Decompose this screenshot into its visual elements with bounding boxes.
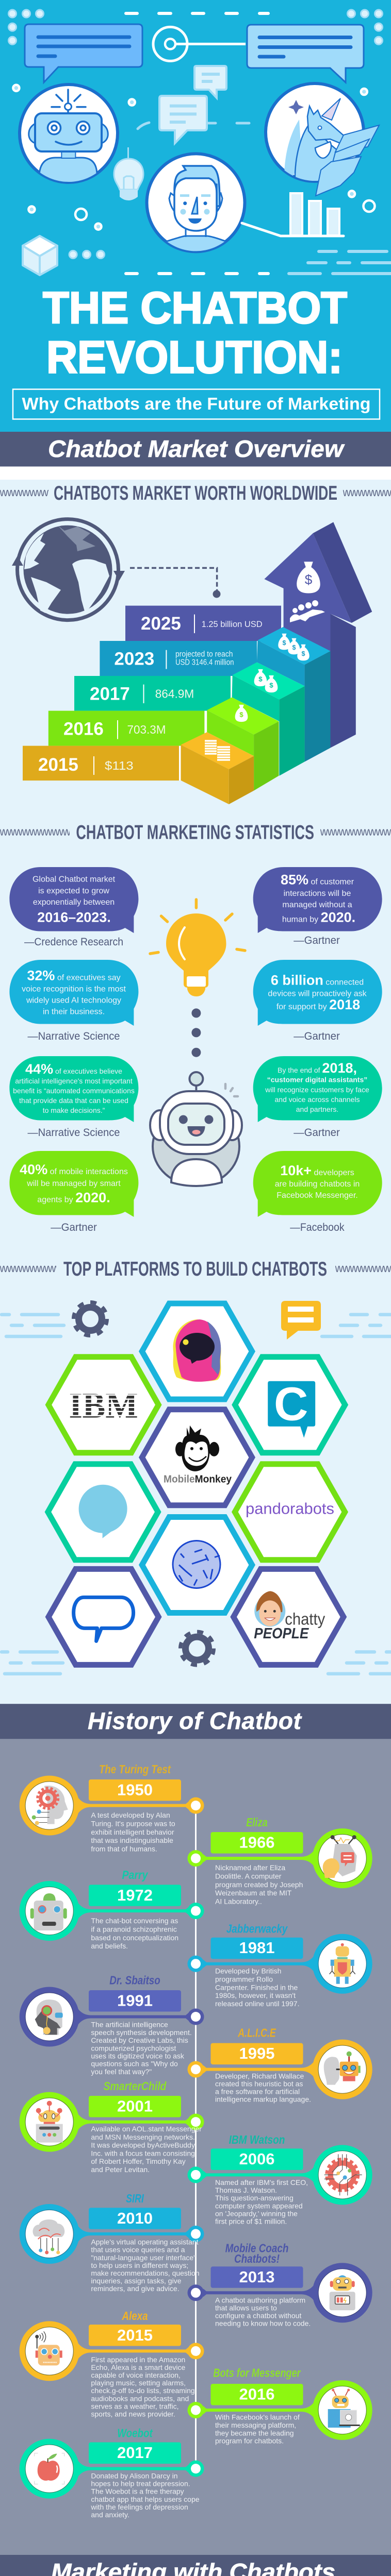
hexagon: chatty people: PEOPLE <box>254 1625 309 1642</box>
timeline 1991: uses its digitized voice to ask <box>91 2052 185 2060</box>
timeline 2013: configure a chatbot without <box>215 2311 301 2319</box>
timeline 2001: SmarterChild <box>104 2079 167 2093</box>
ring dots <box>13 85 374 230</box>
timeline 1966 <box>188 1816 372 1906</box>
hexagon: chatty people: chatty <box>285 1609 325 1628</box>
stat: end of 2018: By the end of 2018, <box>278 1060 357 1076</box>
icon: robot battery <box>330 2275 355 2310</box>
stat: 40 percent: —Gartner <box>51 1222 97 1233</box>
timeline 2001: Inc. with a focus team consisting <box>91 2149 195 2157</box>
subtitle box: Why Chatbots are the Future of Marketing <box>22 394 371 413</box>
timeline 2010: that uses voice queries and a <box>91 2246 185 2254</box>
stat: 44 percent: artificial intelligence's most important <box>15 1077 133 1085</box>
timeline 1991: you feel that way?" <box>91 2067 152 2076</box>
timeline 1972: The chat-bot conversing as <box>91 1917 178 1925</box>
stat: end of 2018: will recognize customers by face <box>265 1086 369 1094</box>
stat: 85 percent: human by 2020. <box>282 910 355 925</box>
timeline 1966: Eliza <box>246 1816 268 1829</box>
stat: end of 2018: and voice across channels <box>274 1095 360 1104</box>
icon: robot with laptop <box>328 2388 360 2428</box>
icon: robot with control box <box>36 2101 63 2143</box>
icon: money bags: $ <box>269 682 273 689</box>
stat: 32 percent: in their business. <box>43 1008 105 1016</box>
step: yellow <box>181 732 254 804</box>
timeline 2010: SIRI <box>126 2192 144 2205</box>
icon: robot conversation <box>323 1835 357 1878</box>
target connector <box>153 27 246 61</box>
timeline 1995: created this heuristic bot as <box>215 2080 303 2088</box>
hexagon: chatty people <box>234 1569 344 1665</box>
timeline 1966: AI Laboratory.. <box>215 1897 262 1906</box>
timeline 1950: from that of humans. <box>91 1845 157 1853</box>
stat: 85 percent: —Gartner <box>294 935 340 946</box>
timeline 2017: and anxiety. <box>91 2511 129 2519</box>
title: REVOLUTION: <box>46 332 343 382</box>
hexagon: C logo <box>235 1357 345 1453</box>
icon: robot with hat <box>30 1893 67 1930</box>
timeline 2016 <box>188 2366 372 2445</box>
timeline 2015: Alexa <box>122 2309 148 2323</box>
section header: History of Chatbot: History of Chatbot <box>88 1707 302 1734</box>
bar 2025: 1.25 billion USD <box>202 619 263 629</box>
timeline 2001: and MSN Messenging networks. <box>91 2133 195 2141</box>
stat: Global Chatbot market: exponentially between <box>33 898 115 907</box>
icon: circuit gear <box>324 2154 362 2195</box>
timeline 1972: Parry <box>122 1868 149 1882</box>
stat: 10k developers: 10k+ developers <box>280 1163 354 1178</box>
timeline 2001: of Robert Hoffer, Timothy Kay <box>91 2157 186 2165</box>
icon: apple <box>35 2453 64 2484</box>
icon: money bags: $ <box>282 639 286 647</box>
stat: 44 percent: to make decisions.” <box>43 1106 105 1114</box>
stat: 6 billion: for support by 2018 <box>276 997 360 1012</box>
timeline 1991: questions such as "Why do <box>91 2060 178 2068</box>
timeline 2017: hopes to help treat depression. <box>91 2480 190 2488</box>
right speech bubble <box>247 25 364 82</box>
stat: 32 percent: voice recognition is the most <box>22 985 126 993</box>
bar 2023: 2023 <box>114 649 154 669</box>
bar 2016: 703.3M <box>127 723 166 736</box>
timeline 1991: Created by Creative Labs, this <box>91 2036 188 2044</box>
robot portrait <box>18 83 119 184</box>
stat: 6 billion: —Gartner <box>294 1030 340 1042</box>
timeline 2017 <box>20 2427 204 2519</box>
hexagon: blue globe <box>142 1517 252 1613</box>
timeline 1966: Weizenbaum at the MIT <box>215 1889 292 1897</box>
bar 2015: $113 <box>105 759 134 772</box>
timeline 1966: program created by Joseph <box>215 1880 303 1889</box>
bar chart icon <box>242 193 344 236</box>
timeline 2001: Available on AOL.stant Messenger <box>91 2125 202 2133</box>
timeline 1991: The artificial intelligence <box>91 2021 168 2029</box>
bar 2025 <box>125 606 281 641</box>
icon: money bags: $ <box>301 650 305 657</box>
timeline 1950 <box>20 1762 204 1853</box>
icon: yellow chat <box>281 1301 321 1340</box>
small chat bubbles <box>138 66 249 143</box>
hexagon: IBM <box>48 1357 158 1453</box>
timeline 2016: they became the leading <box>215 2429 294 2437</box>
hexagon: hooded logo <box>142 1303 252 1399</box>
timeline 1981: Developed by British <box>215 1967 281 1975</box>
stat: 40 percent: agents by 2020. <box>37 1190 110 1206</box>
hexagon: C logo: C <box>274 1378 308 1431</box>
big growth arrow <box>257 522 372 761</box>
timeline 1991 <box>20 1973 204 2076</box>
stat: end of 2018: —Gartner <box>294 1127 340 1139</box>
bar 2016 <box>48 711 204 746</box>
timeline 1966: Doolittle. A computer <box>215 1872 282 1880</box>
timeline 2017: chatbot app that helps users cope <box>91 2495 200 2503</box>
bar 2017: 2017 <box>90 684 130 704</box>
unicorn portrait <box>266 83 379 196</box>
timeline 2015: audiobooks and podcasts, and <box>91 2394 189 2402</box>
stat: 85 percent: managed without a <box>282 901 352 909</box>
timeline 2013: Chatbots! <box>234 2252 280 2265</box>
stat: Global Chatbot market <box>9 867 138 948</box>
section header: Chatbot Market Overview <box>0 432 391 467</box>
stat: 40 percent: 40% of mobile interactions <box>20 1162 128 1177</box>
timeline 2015: sports, and news provider. <box>91 2410 175 2418</box>
timeline 2013: Mobile Coach <box>225 2242 288 2255</box>
stat: 32 percent: 32% of executives say <box>27 968 121 984</box>
timeline 1981: programmer Rollo <box>215 1975 273 1983</box>
decorative dashes <box>2 1315 391 1674</box>
hexagon: blue bubble <box>48 1464 158 1560</box>
timeline 2017: with the feelings of depression <box>90 2503 188 2511</box>
chart: market worth isometric stairs <box>23 522 372 804</box>
icon: money bags <box>235 634 309 722</box>
stat: 32 percent <box>9 960 138 1042</box>
stat: Global Chatbot market: Global Chatbot market <box>32 875 116 884</box>
timeline 1995 <box>188 2026 372 2104</box>
timeline 2010: 2010 <box>117 2209 153 2227</box>
stat: 40 percent <box>9 1151 138 1233</box>
timeline 2010: "natural-language user interface" <box>91 2253 196 2262</box>
timeline 2001: and Peter Levitan. <box>91 2165 150 2174</box>
left speech bubble <box>25 24 142 82</box>
cube icon <box>23 236 57 275</box>
panel: hero background <box>0 0 391 432</box>
icon: money bags: $ <box>258 675 263 683</box>
timeline 2010: Apple's virtual operating assistant <box>91 2238 199 2246</box>
section header: Chatbot Market Overview: Chatbot Market Overview <box>48 435 345 462</box>
timeline 2006: Named after IBM's first CEO, <box>215 2178 308 2187</box>
stat: 32 percent: —Narrative Science <box>28 1030 120 1042</box>
icon: yellow lightbulb <box>150 900 245 996</box>
timeline 1966: 1966 <box>239 1833 274 1852</box>
stat: Global Chatbot market: is expected to grow <box>38 887 109 895</box>
bar 2025: 2025 <box>141 614 181 634</box>
stat: 6 billion: 6 billion connected <box>271 972 364 988</box>
timeline 1972: 1972 <box>117 1886 153 1904</box>
timeline 2015: Echo, Alexa is a smart device <box>91 2363 185 2371</box>
stat: end of 2018: “customer digital assistants” <box>267 1075 367 1083</box>
timeline 1950: 1950 <box>117 1781 153 1799</box>
hexagon: speech outline <box>48 1569 158 1665</box>
timeline 2013: A chatbot authoring platform <box>215 2296 305 2304</box>
timeline 2010 <box>20 2192 204 2293</box>
stat: end of 2018: and partners. <box>296 1105 338 1113</box>
timeline 1981 <box>188 1922 372 2008</box>
hexagon: IBM: IBM <box>69 1386 138 1426</box>
timeline 1981: 1980s, however, it wasn't <box>215 1991 296 1999</box>
icon: gear bottom <box>181 1632 214 1665</box>
decorative dots top <box>8 10 383 259</box>
bar 2023: USD 3146.4 million <box>175 658 234 667</box>
icon: gear top <box>73 1302 107 1335</box>
timeline 1991: speech synthesis development. <box>91 2028 192 2037</box>
timeline 2015: 2015 <box>117 2326 153 2344</box>
subtitle box <box>13 389 380 419</box>
icon: head and robot <box>324 2052 361 2085</box>
stat: 6 billion: devices will proactively ask <box>268 989 367 998</box>
timeline 2006: IBM Watson <box>229 2133 285 2146</box>
timeline 2015: playing music, setting alarms, <box>91 2379 186 2387</box>
stat: 44 percent: —Narrative Science <box>28 1127 120 1139</box>
timeline 2006: first price of $1 million. <box>215 2217 287 2225</box>
timeline 2010: to help users in different ways; <box>91 2261 188 2269</box>
robot face <box>179 1084 238 1137</box>
timeline 2017: Donated by Alison Darcy in <box>91 2472 177 2480</box>
timeline 2010: inqueries, assign tasks, give <box>91 2277 182 2285</box>
bar 2015: 2015 <box>38 755 78 775</box>
stat: 10k developers: Facebook Messenger. <box>276 1191 358 1200</box>
icon: gear head <box>32 1786 68 1825</box>
stat: 85 percent: 85% of customer <box>281 872 354 887</box>
stat: 44 percent: that provide data that can be used <box>19 1096 128 1105</box>
timeline spine <box>195 1813 197 2461</box>
timeline 2017: The Woebot is a free therapy <box>91 2487 184 2496</box>
timeline 2016: program for chatbots. <box>215 2437 284 2445</box>
bar 2016: 2016 <box>63 719 104 739</box>
timeline 2017: Woebot <box>117 2427 153 2440</box>
step: teal <box>232 663 305 776</box>
timeline 2010: make recommendations, question <box>91 2269 200 2277</box>
icon: AI head profile <box>35 1999 63 2035</box>
stat: 32 percent: widely used AI technology <box>26 996 121 1005</box>
stair edge line <box>180 626 283 781</box>
icon: arrow money bag and team <box>290 562 325 622</box>
stat: 85 percent: interactions will be <box>284 889 351 898</box>
timeline 2006: This question-answering <box>215 2194 294 2202</box>
pale dashes <box>289 251 391 274</box>
timeline 1950: exhibit intelligent behavior <box>91 1828 174 1836</box>
timeline 2001 <box>20 2079 204 2174</box>
stat: 40 percent: will be managed by smart <box>26 1179 121 1188</box>
timeline 1981: 1981 <box>239 1939 274 1957</box>
timeline 2015: serves as a weather, traffic, <box>91 2402 179 2410</box>
icon: shield robot <box>330 1943 355 1984</box>
panel: market overview background <box>0 480 391 1704</box>
timeline 1950: Turing. It's purpose was to <box>91 1819 175 1827</box>
bar 2023: projected to reach <box>175 650 233 658</box>
stat: 44 percent: 44% of executives believe <box>25 1061 122 1077</box>
hexagon: pandorabots <box>235 1464 345 1560</box>
timeline 2017: 2017 <box>117 2444 153 2462</box>
timeline 2006: Thomas J. Watson. <box>215 2186 277 2194</box>
timeline 2016: Bots for Messenger <box>213 2366 301 2380</box>
bar 2017: 864.9M <box>155 687 194 701</box>
icon: antenna robot <box>35 2331 62 2365</box>
hexagon: MobileMonkey <box>142 1410 252 1505</box>
timeline 2006: computer system appeared <box>215 2201 303 2210</box>
panel: platform hexagons <box>2 1301 391 1674</box>
timeline 2001: 2001 <box>117 2097 153 2115</box>
timeline 1972: if a paranoid schizophrenic <box>91 1925 177 1933</box>
icon: globe <box>12 519 125 620</box>
timeline 1972: and beliefs. <box>91 1942 128 1950</box>
timeline 2016: With Facebook's launch of <box>215 2413 300 2421</box>
bar 2015 <box>23 746 179 781</box>
timeline 2015 <box>20 2309 204 2418</box>
lightbulb <box>114 147 143 200</box>
man portrait <box>146 154 245 258</box>
icon: cloud network <box>33 2219 64 2255</box>
dashed connector <box>130 568 221 598</box>
timeline 2015: First appeared in the Amazon <box>91 2355 185 2364</box>
icon: money bags: $ <box>292 644 296 651</box>
panel: history background <box>0 1739 391 2555</box>
timeline 2013 <box>188 2242 372 2328</box>
stat: 10k developers: are building chatbots in <box>275 1180 360 1189</box>
timeline 2013: 2013 <box>239 2268 274 2286</box>
bar 2017 <box>74 676 231 711</box>
timeline 1991: 1991 <box>117 1992 153 2009</box>
stat: 10k developers <box>253 1151 382 1233</box>
timeline 2010: reminders, and give advice. <box>91 2284 180 2293</box>
stat: 10k developers: —Facebook <box>290 1222 345 1233</box>
title <box>43 283 347 382</box>
panel: statistics <box>9 867 382 1233</box>
timeline 1995: A.L.I.C.E <box>237 2026 276 2039</box>
stat: 44 percent <box>9 1056 138 1139</box>
section header: Marketing with Chatbots <box>0 2555 391 2576</box>
timeline 2006 <box>188 2133 372 2226</box>
bar 2023 <box>100 641 257 676</box>
timeline 1950: A test developed by Alan <box>91 1811 170 1819</box>
white dashes <box>126 13 268 274</box>
timeline 2015: check.g-off to-do lists, streaming <box>91 2386 195 2395</box>
stat: Global Chatbot market: 2016–2023. <box>37 910 111 925</box>
stat: 6 billion <box>253 960 382 1042</box>
icon: money bags: $ <box>239 711 243 719</box>
timeline 2001: It was developed byActiveBuddy <box>91 2141 195 2149</box>
timeline 1966: Nicknamed after Eliza <box>215 1863 285 1872</box>
timeline 1950: The Turing Test <box>99 1762 171 1776</box>
step: blue <box>257 627 330 761</box>
timeline 1972: based on conceptualization <box>91 1934 178 1942</box>
timeline 1991: computerized psychologist <box>91 2044 176 2052</box>
timeline 2015: capable of voice interaction, <box>91 2371 181 2379</box>
timeline 2013: that allows users to <box>215 2303 277 2312</box>
timeline 1981: Carpenter. Finished in the <box>215 1983 298 1991</box>
hero illustration <box>8 10 391 275</box>
stat: 44 percent: benefit is “automated communications <box>13 1087 135 1095</box>
timeline 1950: that was indistinguishable <box>91 1836 173 1844</box>
stat: Global Chatbot market: —Credence Research <box>24 936 123 948</box>
timeline 1972 <box>20 1868 204 1950</box>
timeline 2013: needing to know how to code. <box>215 2319 311 2328</box>
hexagon: pandorabots: pandorabots <box>246 1500 334 1518</box>
connector dots <box>191 1008 201 1057</box>
timeline 2006: 2006 <box>239 2150 274 2168</box>
timeline 1995: intelligence markup language. <box>215 2095 311 2104</box>
timeline 2006: on 'Jeopardy,' winning the <box>215 2209 298 2217</box>
hexagon: MobileMonkey: MobileMonkey <box>164 1473 232 1485</box>
icon: coins <box>205 741 230 760</box>
icon: happy robot <box>150 1072 242 1186</box>
timeline 1995: 1995 <box>239 2044 274 2062</box>
title: THE CHATBOT <box>43 283 347 333</box>
timeline 2016: 2016 <box>239 2385 274 2403</box>
timeline 1995: a free software for artificial <box>215 2088 300 2096</box>
stat: 85 percent <box>253 867 382 946</box>
timeline 2016: their messaging platform, <box>215 2421 296 2429</box>
timeline 1981: Jabberwacky <box>226 1922 288 1936</box>
section header: History of Chatbot <box>0 1704 391 1739</box>
step: green <box>207 698 279 791</box>
timeline 1981: released online until 1997. <box>215 1999 299 2008</box>
icon: arrow money bag and team: $ <box>305 572 313 587</box>
timeline 1995: Developer, Richard Wallace <box>215 2072 304 2080</box>
stat: end of 2018 <box>253 1056 382 1139</box>
timeline 1991: Dr. Sbaitso <box>109 1973 160 1987</box>
